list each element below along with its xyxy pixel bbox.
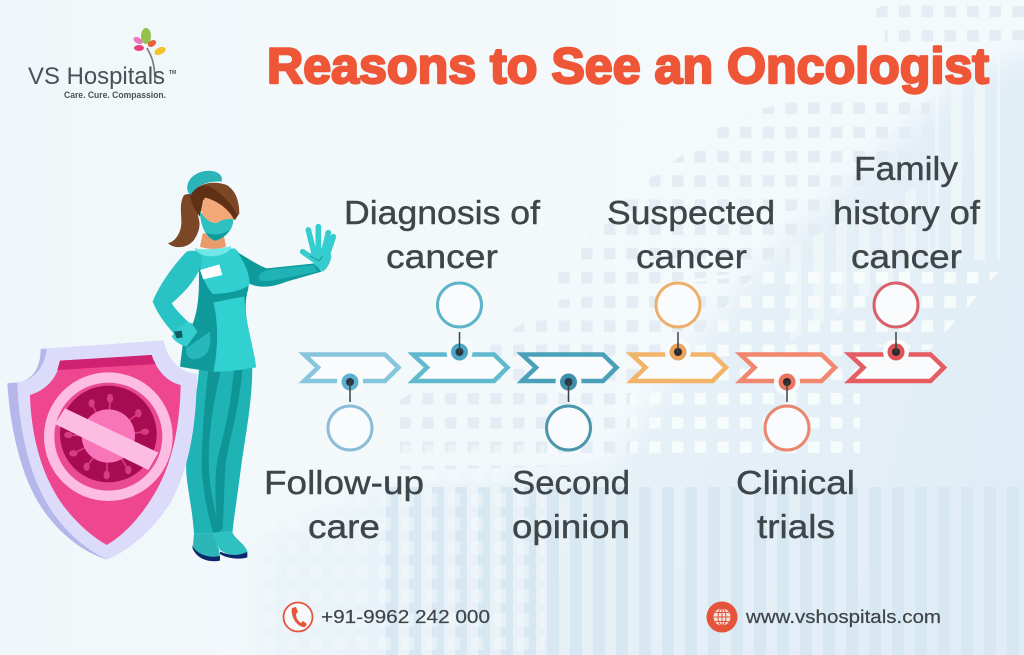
logo bbox=[28, 28, 176, 101]
label: diagnosis of cancer: Diagnosis of bbox=[344, 194, 541, 231]
label: second opinion: opinion bbox=[512, 508, 630, 545]
label: diagnosis of cancer bbox=[344, 194, 541, 275]
label: diagnosis of cancer: cancer bbox=[386, 238, 498, 275]
logo tree icon bbox=[132, 28, 167, 83]
surgical mask bbox=[200, 211, 233, 241]
label: clinical trials bbox=[736, 464, 855, 545]
label: family history of cancer bbox=[833, 150, 981, 275]
rear arm bbox=[153, 251, 202, 347]
collar bbox=[194, 246, 231, 256]
virus core bbox=[82, 409, 135, 463]
hair bbox=[190, 183, 239, 220]
tunic dark base bbox=[180, 250, 256, 372]
right shoe bbox=[213, 531, 247, 555]
label: suspected cancer: Suspected bbox=[607, 194, 775, 231]
raised arm bbox=[233, 250, 322, 287]
step 3: second opinion bbox=[522, 354, 616, 450]
ponytail bbox=[168, 193, 200, 247]
prohibition bar bbox=[55, 408, 158, 470]
gloved raised hand bbox=[303, 227, 333, 272]
shield pink highlight bbox=[57, 355, 156, 370]
label: second opinion bbox=[512, 464, 630, 545]
label: follow-up care bbox=[264, 464, 424, 545]
illustration: virus shield bbox=[7, 341, 197, 559]
label: follow-up care: care bbox=[308, 508, 380, 545]
phone number: +91-9962 242 000 bbox=[321, 607, 490, 627]
label: follow-up care: Follow-up bbox=[264, 464, 424, 501]
title: Reasons to See an Oncologist bbox=[267, 38, 989, 94]
icon: phone bbox=[284, 602, 312, 632]
shield back bbox=[7, 341, 197, 559]
chevron timeline bbox=[304, 283, 944, 450]
neck bbox=[200, 233, 226, 249]
website: www.vshospitals.com bbox=[745, 607, 941, 627]
tunic upper chest bbox=[195, 248, 249, 294]
label: clinical trials: trials bbox=[757, 508, 835, 545]
shield front bbox=[17, 341, 197, 559]
prohibition ring bbox=[44, 372, 173, 501]
gloved hip hand bbox=[172, 323, 197, 347]
ring inner pink bbox=[54, 383, 162, 491]
illustration: nurse bbox=[153, 171, 333, 561]
name badge bbox=[200, 264, 222, 279]
hair dark strand bbox=[190, 186, 237, 220]
cap bbox=[187, 171, 222, 195]
left shoe bbox=[193, 533, 220, 560]
label: second opinion: Second bbox=[512, 464, 630, 501]
step 2: diagnosis of cancer bbox=[413, 283, 508, 381]
trouser shading bbox=[202, 370, 242, 533]
label: family history of cancer: history of bbox=[833, 194, 981, 231]
logo trademark: TM bbox=[169, 70, 176, 76]
label: suspected cancer: cancer bbox=[636, 238, 747, 275]
label: suspected cancer bbox=[607, 194, 775, 275]
label: clinical trials: Clinical bbox=[736, 464, 855, 501]
step 5: clinical trials bbox=[740, 354, 835, 450]
face bbox=[202, 198, 234, 223]
trousers bbox=[186, 367, 252, 533]
label: family history of cancer: Family bbox=[854, 150, 959, 187]
virus spikes bbox=[65, 395, 148, 479]
virus background bbox=[60, 386, 157, 482]
label: family history of cancer: cancer bbox=[851, 238, 962, 275]
step 4: suspected cancer bbox=[632, 283, 726, 381]
tunic pocket bbox=[186, 332, 210, 359]
logo wordmark: VS Hospitals bbox=[28, 63, 165, 90]
step 1: follow-up care bbox=[304, 354, 398, 450]
tunic lower panel bbox=[213, 297, 256, 372]
shield inner pink bbox=[30, 355, 181, 545]
step 6: family history of cancer bbox=[850, 283, 944, 381]
logo tagline: Care. Cure. Compassion. bbox=[64, 90, 166, 101]
icon: globe bbox=[706, 602, 738, 632]
